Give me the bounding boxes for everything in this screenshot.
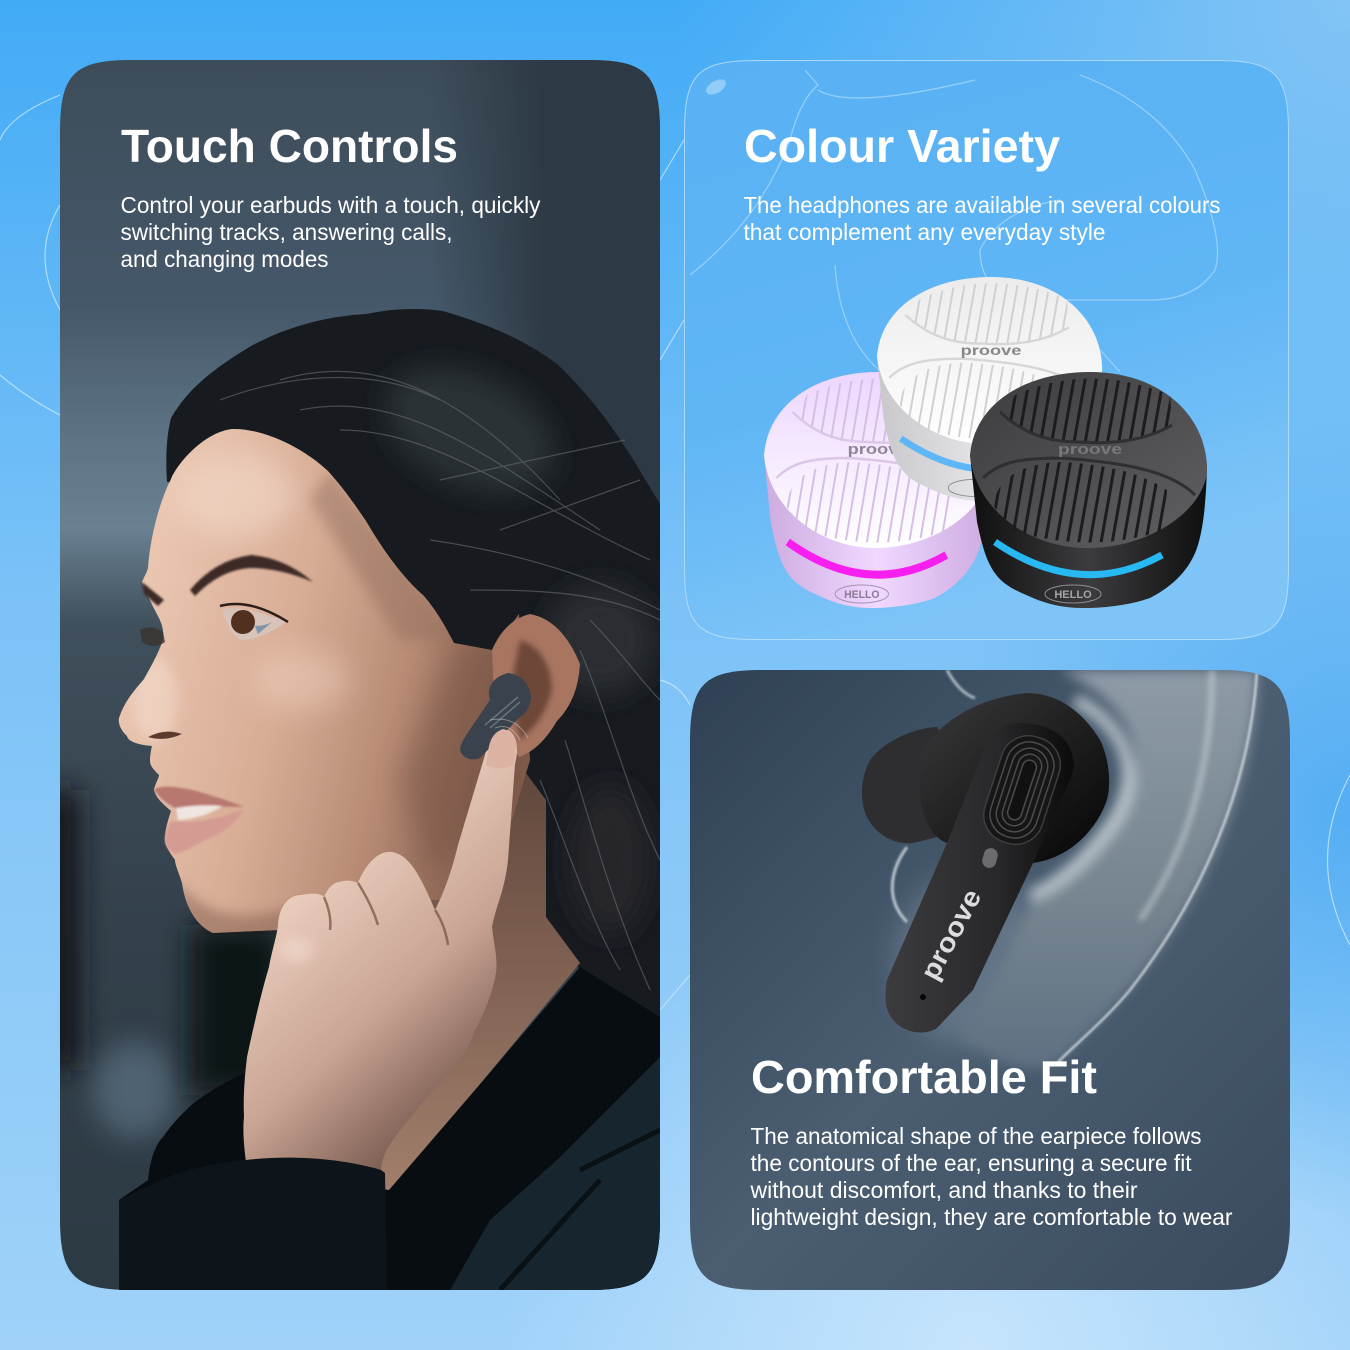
white case — [877, 277, 1102, 501]
description: switching tracks, answering calls, — [120, 219, 452, 245]
description: lightweight design, they are comfortable to wear — [750, 1204, 1233, 1230]
pink case: proove — [848, 442, 908, 458]
mic dot — [920, 994, 926, 1000]
description: The anatomical shape of the earpiece follows — [750, 1123, 1202, 1149]
hand — [243, 729, 517, 1175]
blurred office background — [30, 60, 660, 1138]
face — [119, 429, 530, 950]
panel: comfortable fit — [690, 670, 1290, 1290]
description: The headphones are available in several colours — [744, 192, 1220, 218]
logo: proove — [915, 884, 987, 985]
heading: Comfortable Fit — [751, 1051, 1097, 1103]
description: that complement any everyday style — [744, 219, 1106, 245]
heading: Touch Controls — [121, 120, 458, 172]
heading: Colour Variety — [744, 120, 1060, 172]
eyes — [140, 604, 288, 646]
pink case: HELLO — [844, 589, 880, 601]
touch pad — [983, 735, 1061, 845]
black case: proove — [1058, 441, 1122, 458]
black case — [970, 372, 1207, 608]
description: Control your earbuds with a touch, quickly — [120, 192, 541, 218]
ear — [492, 614, 580, 757]
panel: colour variety — [684, 60, 1289, 640]
description — [750, 1123, 1233, 1230]
earbud — [862, 693, 1109, 1033]
LED — [982, 848, 998, 868]
white case: proove — [961, 343, 1021, 359]
neck — [381, 773, 580, 1190]
description: the contours of the ear, ensuring a secure fit — [750, 1150, 1192, 1176]
head — [919, 693, 1109, 863]
description: without discomfort, and thanks to their — [750, 1177, 1138, 1203]
black case: HELLO — [1054, 589, 1092, 601]
description: and changing modes — [120, 246, 328, 272]
pink case — [764, 372, 989, 608]
jacket sleeve cuff — [119, 1158, 387, 1290]
description — [120, 192, 541, 272]
lips — [154, 787, 244, 854]
hair — [166, 309, 660, 1020]
description — [744, 192, 1220, 245]
stem — [886, 723, 1074, 1033]
ear tip — [862, 727, 945, 843]
panel: touch controls — [30, 60, 660, 1290]
swirl of light — [892, 670, 1257, 1068]
eyebrow — [142, 555, 313, 606]
jacket — [119, 967, 660, 1290]
earbud in ear — [460, 673, 531, 768]
